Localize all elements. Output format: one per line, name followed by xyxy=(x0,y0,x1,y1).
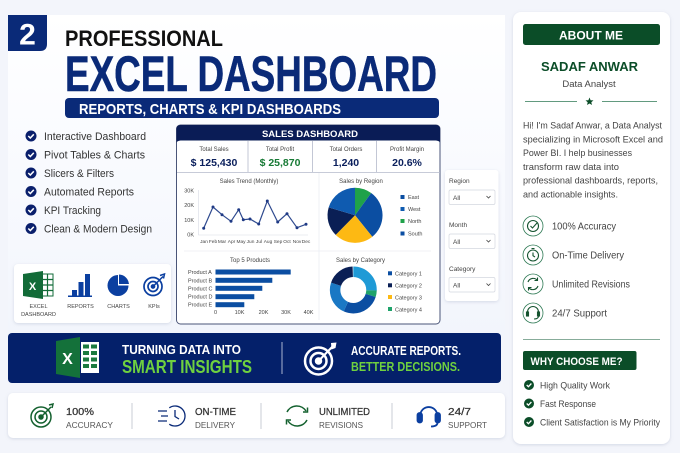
icon: revisions arrows xyxy=(286,406,308,426)
kpi row: Total Sales xyxy=(199,147,229,153)
panel: filters: Category xyxy=(449,266,476,273)
badge: number 2: 2 xyxy=(19,18,36,52)
line chart: sales trend: 20K xyxy=(184,203,194,209)
icon: excel large: X xyxy=(62,351,73,368)
feature checklist: Clean & Modern Design xyxy=(44,224,152,236)
bio text: Hi! I'm Sadaf Anwar, a Data Analyst xyxy=(523,120,662,132)
tool labels: DASHBOARD xyxy=(21,312,56,318)
icon: excel xyxy=(23,271,53,299)
title: excel dashboard: EXCEL DASHBOARD xyxy=(65,46,437,102)
pie chart: sales by region: West xyxy=(408,207,421,213)
badge: number 2 xyxy=(8,15,47,52)
subtitle bar: REPORTS, CHARTS & KPI DASHBOARDS xyxy=(79,101,341,118)
divider with star xyxy=(525,98,657,105)
benefits list: Unlimited Revisions xyxy=(552,280,630,290)
icon: kpi target xyxy=(144,274,164,296)
title: professional: PROFESSIONAL xyxy=(65,26,223,51)
banner text: turning data xyxy=(122,342,252,377)
panel: filters: All xyxy=(453,282,461,290)
donut chart: sales by category: Category 3 xyxy=(395,295,422,301)
icon: target white xyxy=(305,342,336,374)
dashboard header xyxy=(176,125,440,143)
bar chart: top 5 products: 30K xyxy=(281,310,291,316)
kpi row: $ 125,430 xyxy=(191,157,238,169)
line chart: sales trend: 10K xyxy=(184,218,194,224)
donut chart: sales by category: Category 2 xyxy=(395,284,422,290)
bio text: specializing in Microsoft Excel and xyxy=(523,134,663,146)
subtitle bar xyxy=(65,98,439,118)
banner text: turning data: SMART INSIGHTS xyxy=(122,357,252,377)
bar chart: top 5 products: Top 5 Products xyxy=(230,258,270,264)
pie chart: sales by region: South xyxy=(408,232,422,238)
tool labels: REPORTS xyxy=(67,304,94,310)
feature checklist: Slicers & Filters xyxy=(44,168,114,180)
tool labels: KPIs xyxy=(148,304,160,310)
icon: charts pie xyxy=(108,274,129,296)
bio text: professional dashboards, reports, xyxy=(523,176,658,186)
tool labels: EXCEL xyxy=(29,304,48,310)
reasons list: Client Satisfaction is My Priority xyxy=(540,418,660,428)
why choose me heading: WHY CHOOSE ME? xyxy=(530,356,623,368)
guarantee labels: DELIVERY xyxy=(195,420,235,430)
feature checklist: KPI Tracking xyxy=(44,205,101,217)
feature checklist xyxy=(26,130,152,236)
reasons list: Fast Response xyxy=(540,399,596,410)
tool labels xyxy=(21,304,160,318)
pie chart: sales by region: Sales by Region xyxy=(339,179,383,185)
why choose me heading xyxy=(523,351,636,370)
kpi row: 20.6% xyxy=(392,157,423,169)
bio text: Power BI. I help businesses xyxy=(523,148,632,159)
feature checklist: Automated Reports xyxy=(44,186,134,198)
line chart: sales trend: Sep xyxy=(274,239,283,245)
line chart: sales trend: Sales Trend (Monthly) xyxy=(220,179,278,185)
bar chart: top 5 products: Product E xyxy=(188,303,212,309)
line chart: sales trend: 30K xyxy=(184,188,194,194)
bar chart: top 5 products: 20K xyxy=(259,310,269,316)
bar chart: top 5 products xyxy=(188,258,314,316)
panel: filters: Region xyxy=(449,178,470,185)
pie chart: sales by region xyxy=(328,179,422,243)
icon: delivery clock xyxy=(158,406,185,426)
benefits list: On-Time Delivery xyxy=(552,250,624,262)
kpi row: Total Orders xyxy=(330,147,362,153)
line chart: sales trend: Jul xyxy=(256,239,262,245)
dashboard header: SALES DASHBOARD xyxy=(262,129,358,140)
name: SADAF ANWAR xyxy=(541,59,639,74)
donut chart: sales by category: Category 4 xyxy=(395,307,422,313)
bar chart: top 5 products: 0 xyxy=(214,310,217,316)
reasons list xyxy=(524,380,660,428)
kpi row: $ 25,870 xyxy=(260,157,301,169)
panel: filters: All xyxy=(453,195,461,202)
icon: accuracy target xyxy=(31,404,53,427)
line chart: sales trend: Aug xyxy=(264,239,273,245)
icon: reports bars xyxy=(68,274,92,297)
icon: support headset xyxy=(418,407,440,426)
tool labels: CHARTS xyxy=(107,304,130,310)
pie chart: sales by region: North xyxy=(408,219,421,225)
guarantee labels: UNLIMITED xyxy=(319,406,370,418)
guarantee labels: ON-TIME xyxy=(195,406,236,418)
bar chart: top 5 products: 10K xyxy=(235,310,245,316)
banner text: turning data: TURNING DATA INTO xyxy=(122,342,241,357)
kpi row: Total Profit xyxy=(266,147,294,153)
donut chart: sales by category xyxy=(335,258,422,313)
panel: about me sidebar xyxy=(513,12,670,444)
panel: filters xyxy=(445,170,498,301)
line chart: sales trend: 0K xyxy=(187,232,194,238)
reasons list: High Quality Work xyxy=(540,380,610,392)
bar chart: top 5 products: Product D xyxy=(188,295,212,301)
bar chart: top 5 products: Product A xyxy=(188,270,212,276)
donut chart: sales by category: Category 1 xyxy=(395,272,422,278)
panel: main left area xyxy=(8,15,505,335)
bio text: transform raw data into xyxy=(523,162,619,173)
benefits list: 24/7 Support xyxy=(552,308,607,320)
panel: guarantees strip xyxy=(8,393,505,438)
line chart: sales trend: Oct xyxy=(283,239,291,245)
feature checklist: Interactive Dashboard xyxy=(44,131,146,143)
line chart: sales trend: Mar xyxy=(218,239,227,245)
benefits list xyxy=(523,216,630,323)
line chart: sales trend: Apr xyxy=(228,239,236,245)
about me heading xyxy=(523,24,660,45)
icon: excel: X xyxy=(29,281,37,293)
guarantee labels: ACCURACY xyxy=(66,420,113,430)
donut chart: sales by category: Sales by Category xyxy=(336,258,385,264)
benefits list: 100% Accuracy xyxy=(552,222,616,232)
icon: excel large xyxy=(56,337,99,378)
line chart: sales trend: Nov xyxy=(293,239,302,245)
about me heading: ABOUT ME xyxy=(559,28,623,42)
banner xyxy=(8,333,501,383)
chart dividers xyxy=(184,173,431,320)
bio text: and actionable insights. xyxy=(523,190,618,200)
feature checklist: Pivot Tables & Charts xyxy=(44,150,145,162)
line chart: sales trend: Dec xyxy=(302,239,311,245)
guarantee labels: REVISIONS xyxy=(319,420,363,430)
guarantee labels xyxy=(66,406,487,430)
bio text xyxy=(523,120,663,200)
bar chart: top 5 products: 40K xyxy=(304,310,314,316)
guarantee labels: 100% xyxy=(66,406,94,418)
banner text: accurate reports: BETTER DECISIONS. xyxy=(351,360,460,374)
panel: filters: Month xyxy=(449,222,467,229)
kpi row: 1,240 xyxy=(333,157,359,169)
pie chart: sales by region: East xyxy=(408,195,419,201)
role: Data Analyst xyxy=(562,79,616,90)
guarantee labels: SUPPORT xyxy=(448,420,487,430)
panel: sales dashboard xyxy=(176,125,440,324)
bar chart: top 5 products: Product C xyxy=(188,286,212,292)
banner text: accurate reports: ACCURATE REPORTS. xyxy=(351,344,461,358)
kpi row: Profit Margin xyxy=(390,147,424,153)
line chart: sales trend: May xyxy=(236,239,246,245)
banner text: accurate reports xyxy=(351,344,461,374)
line chart: sales trend: Feb xyxy=(209,239,217,245)
guarantee labels: 24/7 xyxy=(448,406,471,418)
kpi row xyxy=(177,141,440,172)
panel: tool icons xyxy=(14,264,171,323)
line chart: sales trend: Jan xyxy=(200,239,208,245)
line chart: sales trend: Jun xyxy=(247,239,255,245)
panel: filters: All xyxy=(453,239,461,246)
bar chart: top 5 products: Product B xyxy=(188,278,212,284)
line chart: sales trend xyxy=(184,179,311,245)
